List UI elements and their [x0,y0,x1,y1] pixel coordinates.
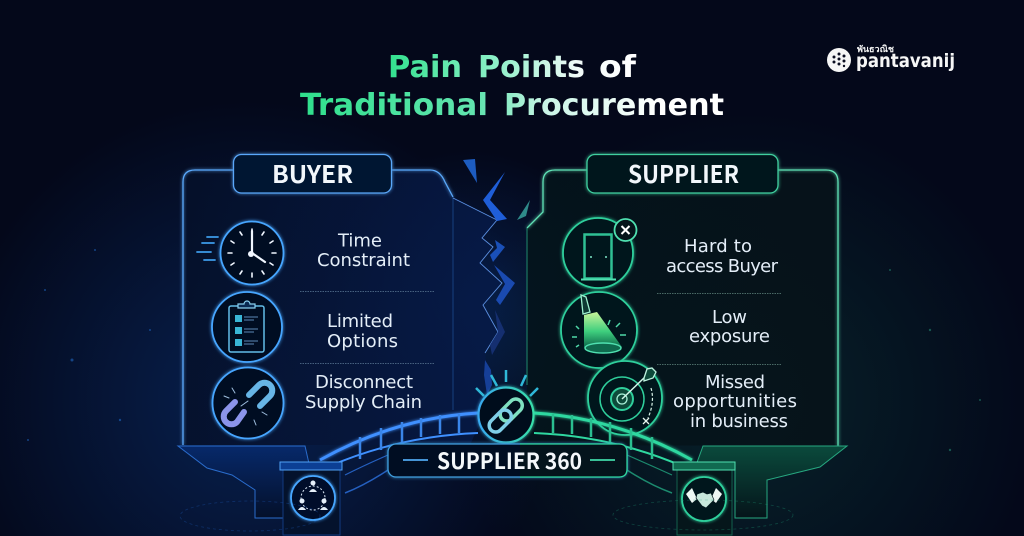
text: limited options: Options [327,331,398,352]
title: Pain [388,50,462,85]
title: Procurement [504,88,724,123]
left bridge arc [320,413,478,493]
buyer panel frame [183,170,502,445]
text: disconnect supply chain: Disconnect [315,372,413,393]
panel: buyer [183,154,502,445]
text: hard to access buyer: access Buyer [666,256,779,277]
icon: center chain link [476,370,538,442]
logo: พันธวณิช [857,44,894,55]
ground rings [180,500,793,531]
text: disconnect supply chain [305,372,422,413]
badge: supplier 360: SUPPLIER 360 [437,444,582,476]
lightning crack [463,159,530,395]
right pillar [673,446,847,535]
badge: supplier 360 [388,444,627,477]
icon: spotlight [561,292,637,368]
text: time constraint: Constraint [317,250,410,271]
icon: handshake [682,477,726,521]
text: low exposure [689,307,770,347]
icon: clock [197,222,284,284]
title: Traditional [300,88,488,123]
icon: people network [291,476,335,520]
text: time constraint [317,230,410,271]
text: missed opportunities [673,372,797,432]
right bridge arc [534,413,692,493]
logo [827,44,955,72]
text: hard to access buyer: Hard to [684,236,752,257]
supplier panel frame [527,170,838,446]
title: Points [478,50,585,85]
bridge [320,413,692,493]
divider [300,292,435,364]
supplier heading [587,154,778,193]
logo: pantavanij [856,50,955,72]
buyer heading [234,154,392,193]
divider [657,294,782,364]
icon: door with x [563,218,636,288]
text: missed opportunities: opportunities [673,391,797,412]
text: missed opportunities: in business [690,411,788,432]
text: time constraint: Time [337,230,382,252]
text: hard to access buyer [666,236,779,277]
icon: checklist [212,292,282,362]
icon: target [588,361,662,435]
text: limited options: Limited [327,311,393,332]
icon: broken chain [212,368,284,438]
buyer heading: BUYER [272,155,353,190]
text: low exposure: Low [712,307,747,328]
panel: supplier [527,154,838,446]
text: low exposure: exposure [689,326,770,347]
text: limited options [327,311,398,352]
supplier heading: SUPPLIER [628,155,739,190]
title: of [599,50,637,85]
text: missed opportunities: Missed [705,372,765,393]
text: disconnect supply chain: Supply Chain [305,392,422,413]
title [300,50,724,123]
left pillar [178,446,342,535]
